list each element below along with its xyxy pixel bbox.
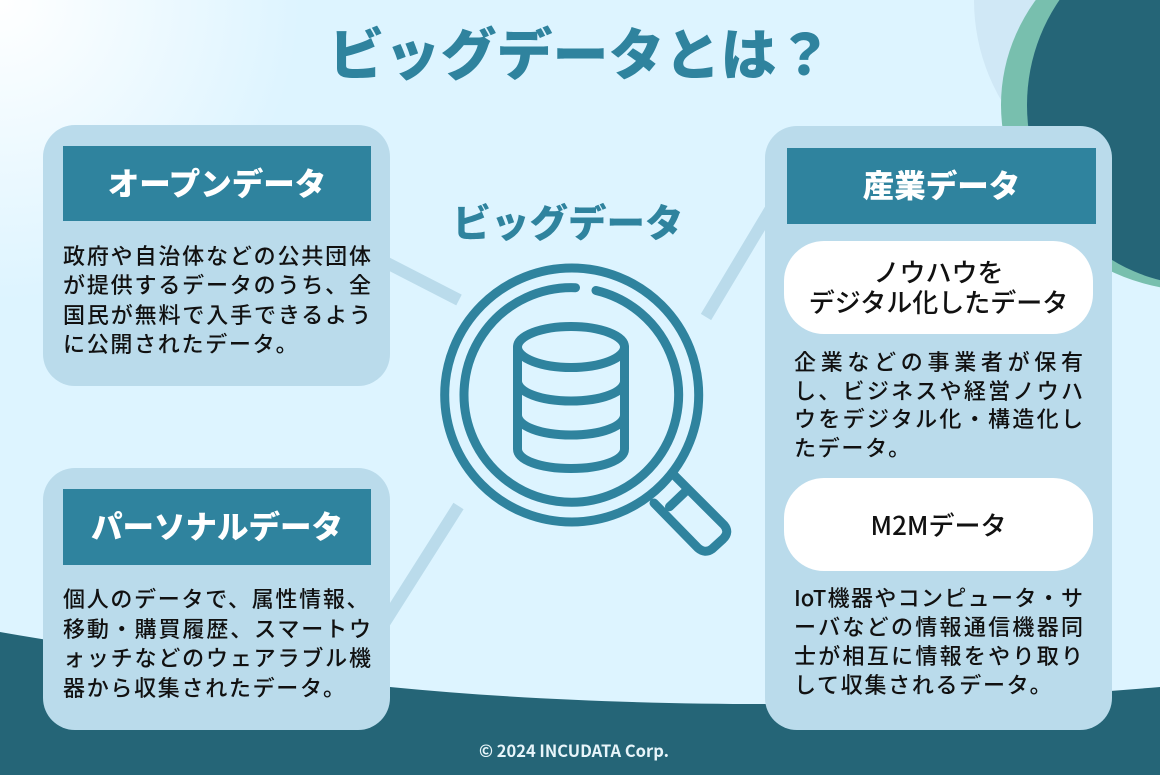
text: personal data description: [63, 582, 371, 703]
text: know-how description: [794, 345, 1083, 463]
heading: personal data: パーソナルデータ: [91, 502, 343, 548]
sub-heading: know-how: デジタル化したデータ: [809, 283, 1068, 320]
text: M2M description: して収集されるデータ。: [794, 668, 1053, 700]
text: know-how description: 企業などの事業者が保有: [794, 345, 1083, 377]
text: personal data description: 器から収集されたデータ。: [63, 671, 347, 703]
text: personal data description: 個人のデータで、属性情報、: [63, 582, 370, 614]
sub-heading: M2M: M2Mデータ: [870, 506, 1006, 543]
text: M2M description: ーバなどの情報通信機器同: [794, 610, 1083, 642]
panel: open data: [43, 125, 390, 386]
panel: personal data: [43, 468, 390, 730]
heading: open data: [63, 146, 371, 221]
heading: industrial data: 産業データ: [863, 161, 1020, 207]
icon: magnifier with database: [440, 264, 732, 556]
text: open data description: 政府や自治体などの公共団体: [63, 238, 371, 270]
heading: open data: オープンデータ: [108, 159, 326, 205]
text: know-how description: たデータ。: [794, 431, 912, 463]
sub-heading: know-how: ノウハウを: [873, 253, 1004, 290]
text: open data description: に公開されたデータ。: [63, 326, 299, 358]
text: personal data description: ォッチなどのウェアラブル機: [63, 641, 371, 673]
text: open data description: が提供するデータのうち、全: [63, 268, 371, 300]
text: open data description: 国民が無料で入手できるよう: [63, 298, 371, 330]
text: open data description: [63, 238, 371, 358]
text: M2M description: IoT機器やコンピュータ・サ: [794, 581, 1083, 613]
heading: industrial data: [787, 148, 1096, 224]
text: M2M description: 士が相互に情報をやり取り: [794, 639, 1083, 671]
title: ビッグデータとは？: [328, 11, 832, 92]
central label: ビッグデータ: [452, 193, 684, 249]
heading: personal data: [63, 489, 371, 565]
text: know-how description: ウをデジタル化・構造化し: [794, 402, 1083, 434]
copyright: © 2024 INCUDATA Corp.: [479, 738, 669, 762]
sub-heading: M2M: [784, 478, 1093, 571]
sub-heading: know-how: [784, 241, 1093, 334]
text: know-how description: し、ビジネスや経営ノウハ: [794, 374, 1083, 406]
text: personal data description: 移動・購買履歴、スマートウ: [63, 612, 371, 644]
